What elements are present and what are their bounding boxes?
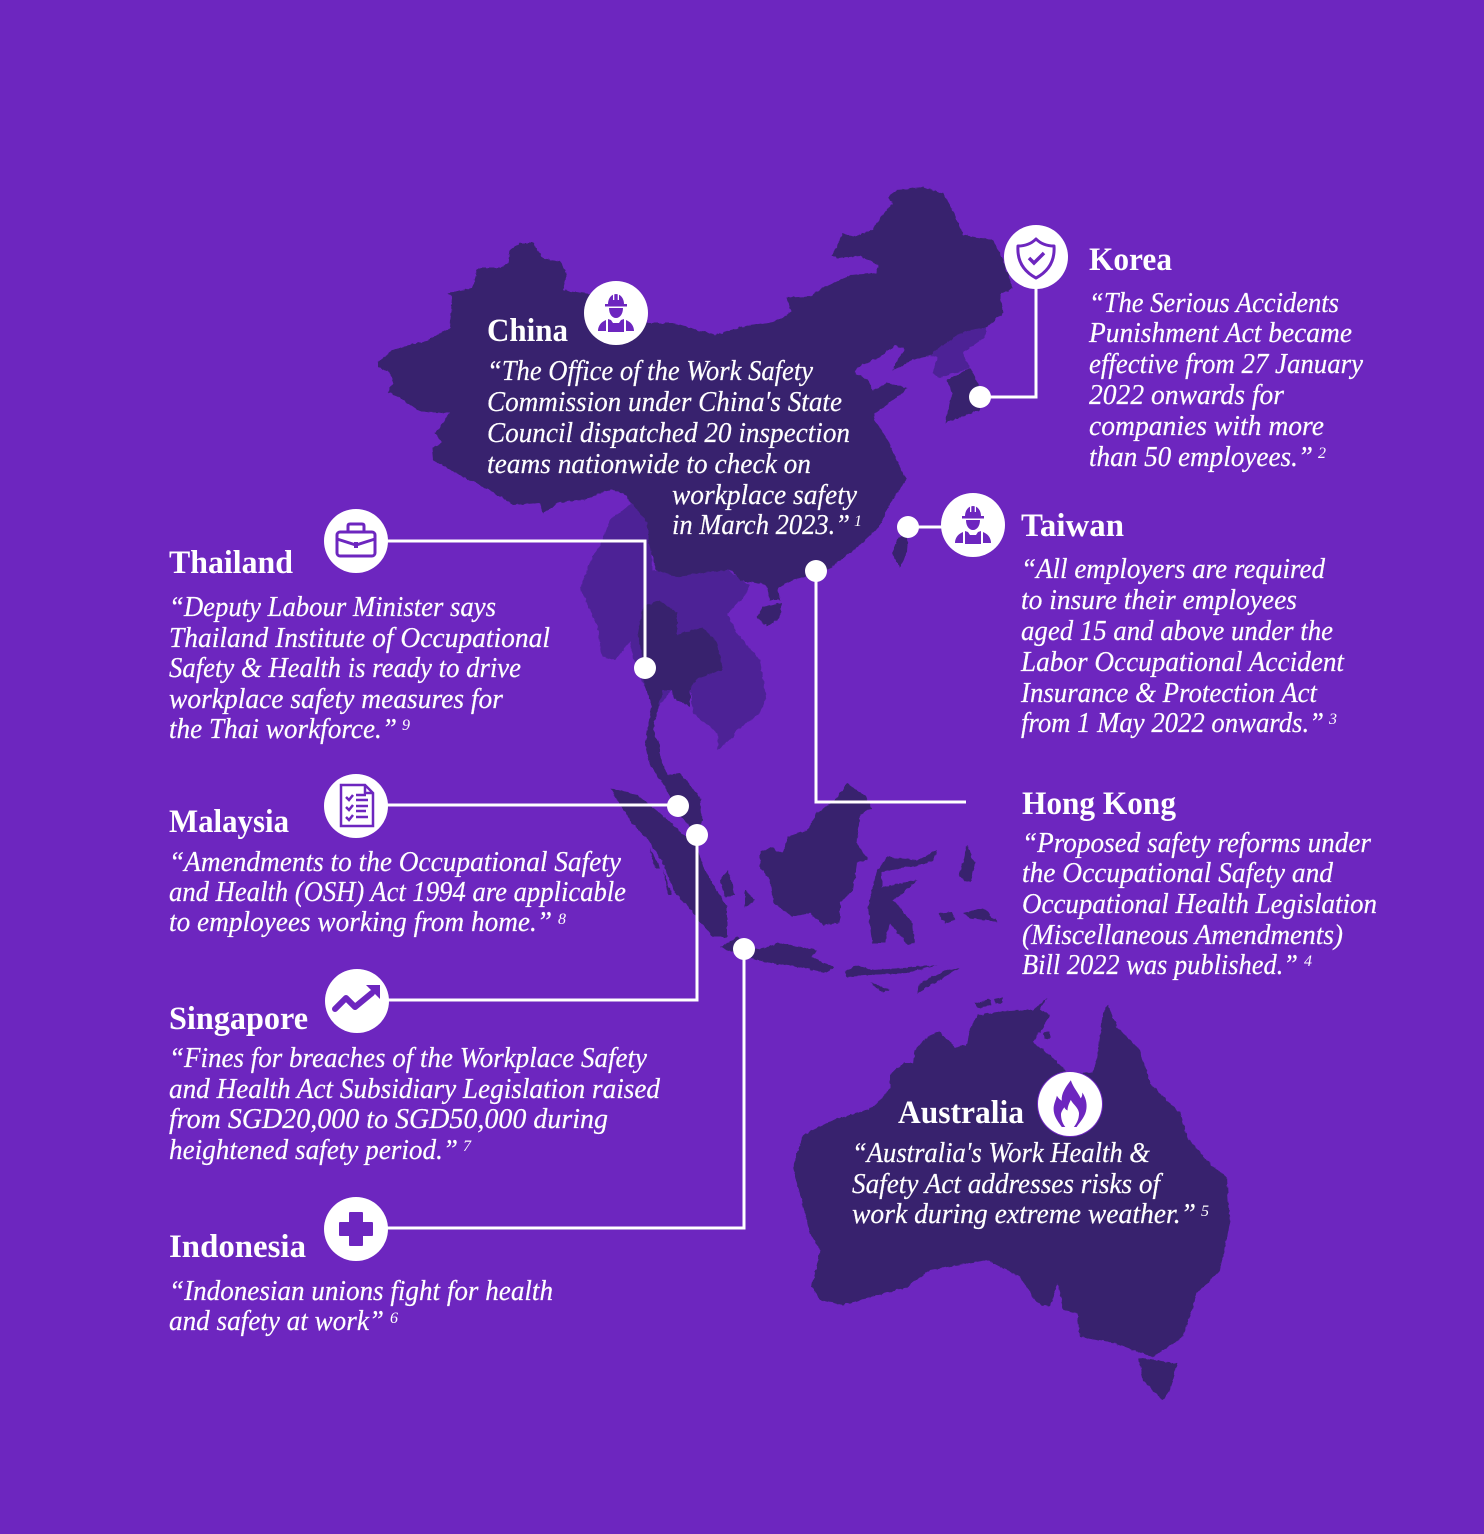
- quote: “Indonesian unions fight for health: [169, 1275, 553, 1307]
- quote: “Amendments to the Occupational Safety: [169, 846, 621, 878]
- map: Sumatra: [610, 788, 727, 937]
- quote: “Fines for breaches of the Workplace Safety: [169, 1042, 647, 1074]
- callout: China: [487, 281, 862, 541]
- heading: Indonesia: [169, 1229, 306, 1265]
- quote: [169, 846, 626, 938]
- quote: [169, 1275, 553, 1337]
- icon: checklist document: [324, 774, 388, 838]
- map: Asia-Pacific: [378, 187, 1230, 1400]
- callout: Taiwan: [897, 493, 1345, 739]
- quote: aged 15 and above under the: [1021, 615, 1333, 647]
- map: Maluku and Lesser Sunda Islands: [640, 825, 998, 993]
- quote: workplace safety measures for: [169, 683, 504, 715]
- quote: the Thai workforce.”: [169, 713, 397, 745]
- connector: [969, 285, 1036, 408]
- icon: construction worker: [941, 493, 1005, 557]
- heading: Singapore: [169, 1001, 308, 1037]
- quote: 4: [1304, 953, 1312, 970]
- map: South Korea: [945, 368, 983, 423]
- heading: Hong Kong: [1022, 786, 1176, 822]
- quote: [1088, 287, 1363, 473]
- quote: and Health (OSH) Act 1994 are applicable: [169, 876, 626, 908]
- heading: China: [487, 313, 568, 349]
- quote: Labor Occupational Accident: [1020, 646, 1345, 678]
- quote: in March 2023.”: [672, 509, 850, 541]
- quote: Insurance & Protection Act: [1020, 677, 1318, 709]
- connector: [805, 560, 966, 802]
- quote: “Australia's Work Health &: [852, 1137, 1150, 1169]
- quote: (Miscellaneous Amendments): [1022, 919, 1343, 951]
- quote: teams nationwide to check on: [487, 448, 811, 480]
- map: China: [378, 187, 1013, 600]
- callout: Australia: [852, 1071, 1209, 1230]
- quote: Thailand Institute of Occupational: [169, 622, 550, 654]
- connector: [385, 795, 689, 817]
- quote: 1: [854, 513, 862, 530]
- callout: Thailand: [169, 509, 656, 745]
- map: Sulawesi: [868, 850, 937, 945]
- heading: Australia: [898, 1095, 1024, 1131]
- callout: Malaysia: [169, 774, 689, 938]
- quote: “The Serious Accidents: [1089, 287, 1339, 319]
- quote: 5: [1201, 1203, 1209, 1220]
- quote: 8: [558, 911, 566, 928]
- quote: workplace safety: [672, 479, 857, 511]
- map: Borneo: [760, 783, 872, 925]
- quote: [169, 591, 550, 745]
- quote: and Health Act Subsidiary Legislation raised: [169, 1073, 660, 1105]
- map: Java: [720, 937, 833, 973]
- map: Thailand and Malay Peninsula: [638, 600, 723, 833]
- connector: [385, 824, 708, 1000]
- map: Australia: [793, 997, 1230, 1357]
- quote: Bill 2022 was published.”: [1022, 949, 1298, 981]
- quote: 7: [463, 1138, 472, 1155]
- quote: Occupational Health Legislation: [1022, 888, 1377, 920]
- quote: work during extreme weather.”: [852, 1198, 1196, 1230]
- connector: [385, 541, 656, 679]
- quote: and safety at work”: [169, 1305, 384, 1337]
- quote: “All employers are required: [1021, 553, 1325, 585]
- callout: Indonesia: [169, 938, 755, 1337]
- quote: effective from 27 January: [1089, 348, 1363, 380]
- icon: medical cross: [324, 1197, 388, 1261]
- map: Tasmania: [1138, 1358, 1177, 1400]
- quote: 9: [402, 717, 410, 734]
- quote: from 1 May 2022 onwards.”: [1021, 707, 1324, 739]
- heading: Taiwan: [1021, 508, 1124, 544]
- icon: flame: [1037, 1071, 1103, 1137]
- quote: heightened safety period.”: [169, 1134, 458, 1166]
- quote: the Occupational Safety and: [1022, 857, 1333, 889]
- quote: 3: [1328, 711, 1337, 728]
- quote: than 50 employees.”: [1089, 441, 1313, 473]
- callout: Hong Kong: [805, 560, 1377, 981]
- icon: construction worker: [584, 281, 648, 345]
- map: Hainan: [757, 603, 782, 627]
- quote: [169, 1042, 660, 1166]
- icon: rising chart arrow: [325, 969, 389, 1033]
- map: Myanmar, Laos, Vietnam, Cambodia, North Korea: [580, 320, 987, 750]
- quote: [487, 355, 862, 541]
- quote: 6: [390, 1310, 398, 1327]
- quote: [1022, 827, 1377, 981]
- quote: [1020, 553, 1345, 739]
- quote: Safety & Health is ready to drive: [169, 652, 521, 684]
- connector: [897, 516, 945, 538]
- quote: “Deputy Labour Minister says: [169, 591, 496, 623]
- icon: briefcase: [324, 509, 388, 573]
- quote: “The Office of the Work Safety: [487, 355, 813, 387]
- quote: [852, 1137, 1209, 1230]
- heading: Korea: [1089, 242, 1172, 278]
- quote: 2022 onwards for: [1089, 379, 1285, 411]
- quote: Safety Act addresses risks of: [852, 1168, 1164, 1200]
- map: Taiwan: [892, 535, 908, 568]
- quote: Commission under China's State: [487, 386, 842, 418]
- connector: [385, 938, 755, 1228]
- quote: to insure their employees: [1021, 584, 1297, 616]
- icon: shield: [1004, 225, 1068, 289]
- quote: Council dispatched 20 inspection: [487, 417, 850, 449]
- quote: “Proposed safety reforms under: [1022, 827, 1372, 859]
- heading: Malaysia: [169, 804, 289, 840]
- heading: Thailand: [169, 545, 293, 581]
- quote: Punishment Act became: [1088, 317, 1352, 349]
- quote: from SGD20,000 to SGD50,000 during: [169, 1103, 608, 1135]
- callout: Korea: [969, 225, 1363, 473]
- quote: to employees working from home.”: [169, 906, 552, 938]
- callout: Singapore: [169, 824, 708, 1166]
- quote: companies with more: [1089, 410, 1324, 442]
- quote: 2: [1318, 445, 1326, 462]
